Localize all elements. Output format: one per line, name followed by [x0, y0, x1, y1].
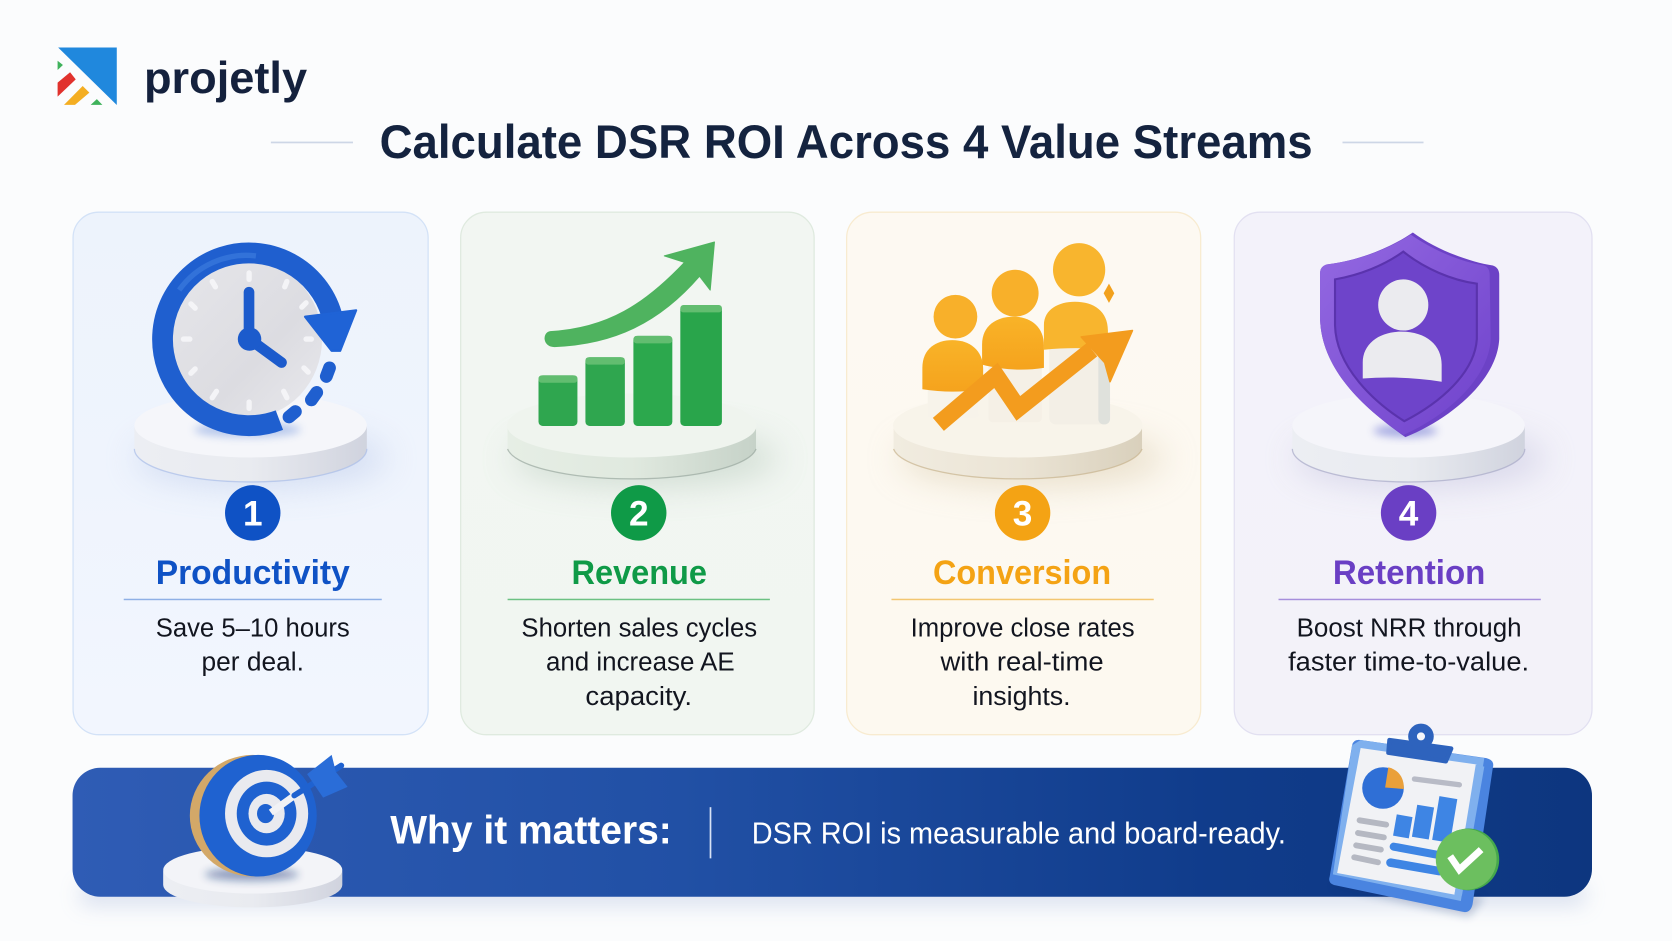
text: productivity description	[156, 615, 350, 677]
panel: revenue	[461, 212, 814, 735]
heading: productivity: Productivity	[156, 554, 350, 592]
text: why it matters: Why it matters:	[390, 808, 672, 852]
text: revenue description: Shorten sales cycles	[521, 615, 757, 643]
number badge 2	[611, 485, 666, 541]
callout band: why it matters	[73, 724, 1592, 917]
text: revenue description: and increase AE	[546, 649, 735, 677]
heading: revenue: Revenue	[572, 554, 707, 592]
panel: conversion	[847, 212, 1201, 735]
icon: clipboard report with check	[1329, 724, 1499, 917]
icon: target with dart	[163, 755, 348, 907]
text: productivity description: per deal.	[202, 649, 304, 677]
number badge 4	[1381, 485, 1436, 541]
text: conversion description	[911, 615, 1135, 711]
logo: projetly	[144, 53, 307, 103]
text: conversion description: insights.	[972, 683, 1071, 711]
number badge 1	[225, 485, 280, 541]
title: Calculate DSR ROI Across 4 Value Streams	[380, 116, 1313, 168]
text: retention description: faster time-to-value.	[1288, 649, 1529, 677]
text: band statement: DSR ROI is measurable and board-ready.	[752, 816, 1286, 850]
number badge 4: 4	[1399, 495, 1419, 534]
logo	[58, 47, 307, 105]
number badge 3	[995, 485, 1050, 541]
panel: productivity	[73, 212, 428, 735]
icon: shield with person on platform	[1292, 232, 1546, 486]
text: revenue description	[521, 615, 757, 711]
text: retention description: Boost NRR through	[1297, 615, 1522, 643]
text: revenue description: capacity.	[585, 683, 692, 711]
text: conversion description: with real-time	[939, 649, 1104, 677]
heading: conversion: Conversion	[933, 554, 1111, 592]
icon: growth bars on platform	[507, 242, 778, 486]
panel: retention	[1234, 212, 1592, 735]
icon: people and rising arrow on platform	[893, 243, 1165, 486]
text: conversion description: Improve close rates	[911, 615, 1135, 643]
icon: clock on platform	[134, 253, 387, 486]
text: productivity description: Save 5–10 hours	[156, 615, 350, 643]
heading: retention: Retention	[1333, 554, 1485, 592]
number badge 3: 3	[1013, 495, 1032, 534]
number badge 1: 1	[243, 495, 263, 534]
text: retention description	[1288, 615, 1529, 677]
number badge 2: 2	[629, 495, 649, 534]
